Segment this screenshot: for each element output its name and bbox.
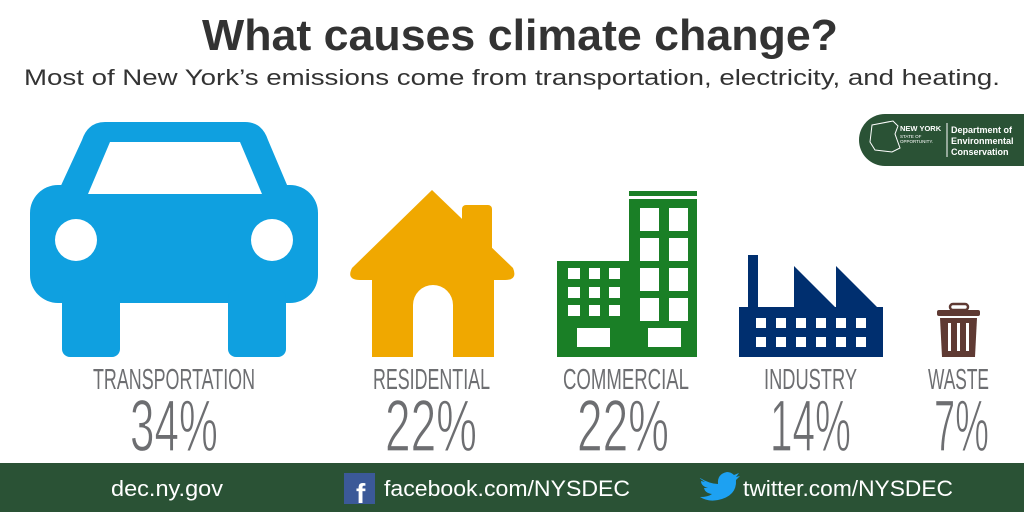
labels and percentages bbox=[93, 364, 989, 467]
logo: NYS DEC: Conservation bbox=[951, 147, 1009, 157]
labels and percentages: 14% bbox=[770, 386, 851, 467]
labels and percentages: 22% bbox=[577, 386, 669, 467]
footer: dec.ny.gov bbox=[111, 476, 223, 501]
logo: NYS DEC: NEW YORK bbox=[900, 124, 942, 133]
logo: NYS DEC: Department of bbox=[951, 125, 1013, 135]
icon: factory bbox=[739, 255, 883, 357]
icon: car bbox=[30, 122, 318, 357]
logo: NYS DEC: Environmental bbox=[951, 136, 1014, 146]
logo: NYS DEC: STATE OF bbox=[900, 134, 922, 139]
subtitle: Most of New York’s emissions come from transportation, electricity, and heating. bbox=[24, 65, 1000, 90]
labels and percentages: 22% bbox=[385, 386, 477, 467]
footer: twitter.com/NYSDEC bbox=[743, 476, 953, 501]
labels and percentages: TRANSPORTATION bbox=[93, 364, 255, 396]
labels and percentages: INDUSTRY bbox=[764, 364, 857, 396]
footer: f bbox=[356, 478, 366, 509]
labels and percentages: RESIDENTIAL bbox=[373, 364, 490, 396]
labels and percentages: 34% bbox=[130, 386, 218, 467]
title: What causes climate change? bbox=[202, 11, 838, 60]
icon: house bbox=[350, 190, 514, 357]
labels and percentages: COMMERCIAL bbox=[563, 364, 689, 396]
footer: facebook.com/NYSDEC bbox=[384, 476, 630, 501]
icon: commercial building bbox=[557, 191, 697, 357]
footer bbox=[0, 463, 1024, 512]
logo: NYS DEC bbox=[859, 114, 1024, 166]
logo: NYS DEC: OPPORTUNITY. bbox=[900, 139, 933, 144]
icon: trash can bbox=[937, 304, 980, 357]
